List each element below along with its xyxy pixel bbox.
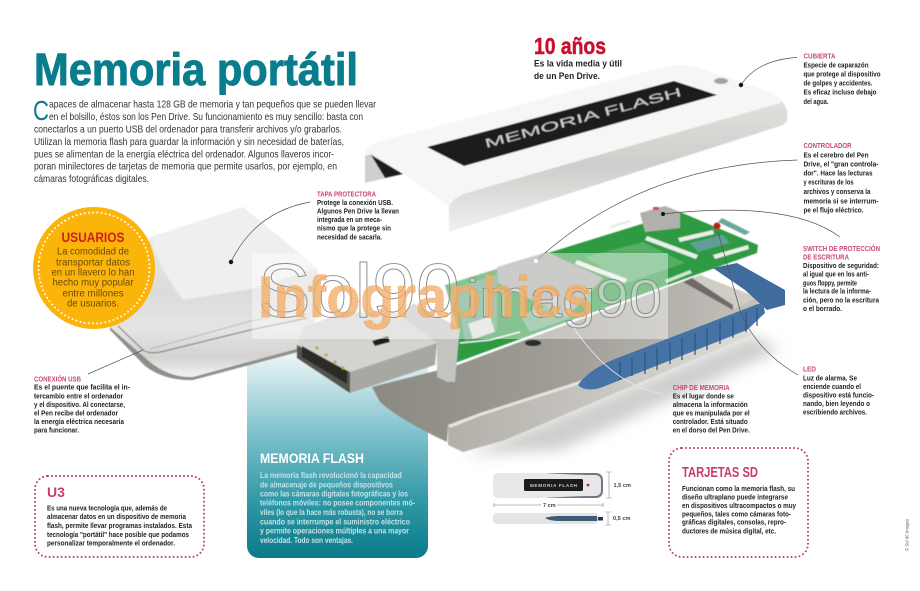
- callout circle: usuarios: de usuarios.: [67, 298, 119, 310]
- callout circle: usuarios: La comodidad de: [57, 246, 129, 258]
- black label: [427, 81, 717, 166]
- write-protect switch: [640, 206, 680, 232]
- caption: conexión USB: el Pen recibe del ordenador: [34, 409, 118, 418]
- illustration: USB plug: [297, 303, 460, 393]
- caption: controlador: Drive, el "gran controla-: [804, 159, 879, 168]
- 10 años heading: 10 años: [534, 33, 606, 59]
- leader: switch: [661, 210, 840, 237]
- caption: chip de memoria: almacena la información: [673, 400, 748, 409]
- text: memoria flash: viles (lo que la hace más robusta), no se borra: [260, 508, 403, 517]
- cover side band: [449, 97, 788, 232]
- board pale pane: [585, 242, 685, 283]
- caption: tapa protectora: TAPA PROTECTORA: [317, 190, 377, 198]
- caption: switch de protección: la lectura de la informa-: [803, 287, 871, 296]
- caption: switch de protección: Dispositivo de seguridad:: [803, 261, 879, 270]
- panel: tarjetas SD: Funcionan como la memoria flash, su: [682, 484, 795, 493]
- cover inner shadow: [365, 154, 403, 183]
- text: memoria flash: cuando se interrumpe el suministro eléctrico: [260, 518, 410, 527]
- panel: U3: personalizar temporalmente el ordenador.: [47, 538, 175, 548]
- caption: controlador: archivos y conserva la: [804, 187, 871, 196]
- caption: controlador: CONTROLADOR: [804, 141, 852, 150]
- plug top face: [297, 312, 437, 372]
- caption: controlador: Es el cerebro del Pen: [804, 150, 869, 159]
- caption: cubierta: de golpes y accidentes.: [804, 79, 872, 88]
- panel: tarjetas SD: diseño ultraplano puede integrarse: [682, 492, 788, 501]
- caption: conexión USB: Es el puente que facilita el in-: [34, 383, 130, 392]
- caption: switch de protección: ción, pero no la escritura: [803, 295, 880, 304]
- illustration: shadow under tray: [465, 335, 780, 455]
- caption: LED: nando, bien leyendo o: [803, 399, 870, 408]
- intro paragraph: poran minilectores de tarjetas de memoria que permite usarlos, por ejemplo, en: [34, 162, 337, 172]
- thickness dimension: [605, 512, 611, 525]
- text: memoria flash: teléfonos móviles: no posee componentes mó-: [260, 499, 415, 508]
- caption: chip de memoria: que es manipulada por el: [673, 409, 750, 418]
- components block: [690, 235, 730, 252]
- usuarios heading: USUARIOS: [62, 229, 124, 245]
- watermark outline word: imag90: [466, 269, 662, 329]
- caption: tapa protectora: necesidad de sacarla.: [317, 232, 382, 241]
- illustration: tray: [372, 275, 760, 452]
- caption: conexión USB: [34, 374, 130, 435]
- text: memoria flash: y permite operaciones múltiples a una mayor: [260, 527, 410, 536]
- caption: chip de memoria: [673, 383, 750, 435]
- watermark panel: [252, 253, 668, 339]
- panel: tarjetas SD: [669, 448, 808, 557]
- caption: LED: dispositivo está funcio-: [803, 390, 874, 399]
- intro paragraph: pues se alimentan de la energía eléctrica del ordenador. Algunos llaveros incor-: [34, 150, 334, 160]
- tarjetas heading: TARJETAS SD: [682, 465, 758, 481]
- caption: conexión USB: tercambio entre el ordenador: [34, 392, 123, 401]
- watermark outline brand: Sol90: [258, 249, 460, 334]
- contacts: [302, 346, 347, 384]
- leader: LED: [718, 232, 798, 375]
- height dimension: [606, 472, 612, 498]
- tray lip: [448, 328, 752, 452]
- intro paragraph: [33, 95, 376, 185]
- caption: chip de memoria: en el dorso del Pen Drive.: [673, 426, 750, 435]
- pen drive front view: [493, 473, 603, 498]
- leader: cubierta: [739, 58, 797, 87]
- dotted border: [669, 448, 808, 557]
- circle: [33, 207, 155, 329]
- caption: switch de protección: SWITCH DE PROTECCIÓN: [803, 244, 880, 253]
- plug front: [297, 345, 350, 393]
- intro paragraph: conectarlos a un puerto USB del ordenador para transferir archivos y/o grabarlos.: [34, 125, 342, 136]
- callout circle: usuarios: [33, 207, 155, 329]
- leader: chip de memoria: [570, 322, 663, 394]
- panel: U3: [35, 476, 204, 557]
- diagram: pen drive dimensions: 0,5 cm: [613, 516, 630, 522]
- text: memoria flash: velocidad. Todo son ventajas.: [260, 536, 353, 545]
- caption: chip de memoria: CHIP DE MEMORIA: [673, 383, 730, 392]
- callout: 10 años: [534, 33, 622, 82]
- panel: U3: flash, permite llevar programas instalados. Esta: [47, 521, 193, 530]
- caption: conexión USB: la energía eléctrica necesaria: [34, 417, 125, 426]
- title: Memoria portátil: [34, 44, 358, 95]
- illustration: circuit board: [445, 206, 758, 363]
- caption: switch de protección: al igual que en los anti-: [803, 270, 869, 279]
- LED: [714, 222, 720, 230]
- diagram: pen drive dimensions: MEMORIA FLASH: [530, 483, 578, 488]
- watermark: [252, 249, 668, 339]
- intro paragraph: en el bolsillo, éstos son los Pen Drive. Su funcionamiento es muy sencillo: basta con: [49, 112, 363, 123]
- caption: controlador: memoria si se interrum-: [804, 196, 879, 205]
- image credit: © Sol 90 Images: [904, 519, 910, 551]
- board underside knob: [525, 340, 541, 346]
- diagram: pen drive dimensions: 1,5 cm: [614, 483, 631, 489]
- callout circle: usuarios: en un llavero lo han: [52, 268, 134, 278]
- plug side face: [350, 343, 437, 393]
- caption: controlador: pe el flujo eléctrico.: [804, 206, 864, 215]
- plug collar: [400, 303, 460, 382]
- caption: tapa protectora: integrada en un meca-: [317, 215, 382, 224]
- callout circle: usuarios: hecho muy popular: [52, 278, 134, 288]
- caption: LED: LED: [803, 365, 817, 374]
- tray window: [683, 275, 757, 310]
- caption: LED: enciende cuando el: [803, 382, 861, 391]
- caption: LED: Luz de alarma. Se: [803, 373, 857, 382]
- caption: cubierta: Especie de caparazón: [804, 60, 869, 69]
- panel: tarjetas SD: ductores de música digital, etc.: [682, 526, 776, 535]
- diagram: pen drive dimensions: 7 cm: [543, 503, 556, 509]
- panel: U3: tecnología "portátil" hace posible que podamos: [47, 530, 189, 539]
- caption: switch de protección: guos floppy, permite: [803, 278, 857, 287]
- memoria flash heading: MEMORIA FLASH: [260, 450, 364, 466]
- illustration: USB protective cap: [110, 207, 322, 380]
- caption: switch de protección: [803, 244, 880, 313]
- small left components: [455, 275, 497, 342]
- cover button: [714, 78, 728, 84]
- caption: conexión USB: para funcionar.: [34, 426, 79, 435]
- caption: cubierta: CUBIERTA: [804, 51, 836, 60]
- text: memoria flash: de almacenaje de pequeños dispositivos: [260, 480, 393, 489]
- front label: [524, 479, 583, 491]
- controller chip: [497, 252, 603, 317]
- leader: conexión USB: [88, 350, 143, 374]
- text: memoria flash: La memoria flash revolucionó la capacidad: [260, 471, 402, 480]
- leader: tapa protectora: [229, 202, 310, 264]
- caption: conexión USB: y el dispositivo. Al conectarse,: [34, 400, 125, 409]
- illustration: cover with label: [365, 65, 788, 232]
- panel: memoria flash background: [247, 335, 428, 558]
- grip ribs: [620, 308, 757, 380]
- intro paragraph: cámaras fotográficas digitales.: [34, 174, 149, 185]
- text: memoria flash: como las cámaras digitales fotográficas y los: [260, 489, 408, 498]
- caption: cubierta: que protege al dispositivo: [804, 70, 881, 79]
- dotted border: [35, 476, 204, 557]
- caption: tapa protectora: [317, 190, 399, 241]
- caption: chip de memoria: Es el lugar donde se: [673, 392, 734, 401]
- intro paragraph: Utilizan la memoria flash para guardar la información y sin necesidad de baterías,: [34, 137, 344, 148]
- intro paragraph: apaces de almacenar hasta 128 GB de memoria y tan pequeños que se pueden llevar: [49, 100, 376, 110]
- illustration: blue back grip: [713, 263, 785, 310]
- U3 heading: U3: [47, 484, 65, 500]
- text: memoria flash: [260, 450, 415, 545]
- caption: controlador: y escrituras de los: [804, 178, 854, 187]
- panel: tarjetas SD: gráficas digitales, consolas, repro-: [682, 518, 786, 527]
- caption: LED: escribiendo archivos.: [803, 407, 867, 416]
- caption: switch de protección: DE ESCRITURA: [803, 252, 850, 261]
- label text: MEMORIA FLASH: [483, 85, 683, 151]
- leader: controlador: [534, 160, 798, 263]
- drop cap: C: [33, 95, 49, 126]
- caption: tapa protectora: Algunos Pen Drive la llevan: [317, 206, 399, 215]
- panel: tarjetas SD: en dispositivos ultracompactos o muy: [682, 501, 797, 510]
- panel: U3: Es una nueva tecnología que, además de: [47, 504, 167, 512]
- plug hole: [372, 336, 390, 346]
- caption: chip de memoria: controlador. Está situado: [673, 417, 748, 426]
- caption: LED: [803, 365, 874, 416]
- caption: cubierta: [804, 51, 881, 106]
- caption: controlador: dor". Hace las lecturas: [804, 169, 872, 178]
- caption: switch de protección: o el borrado.: [803, 304, 842, 313]
- caption: tapa protectora: nismo que la protege sin: [317, 224, 391, 233]
- pen drive side view: [493, 513, 598, 524]
- callout: 10 años: de un Pen Drive.: [534, 71, 600, 82]
- panel: tarjetas SD: pequeños, tales como cámaras foto-: [682, 509, 791, 518]
- length dimension: [494, 503, 603, 507]
- caption: tapa protectora: Protege la conexión USB.: [317, 198, 393, 207]
- callout circle: usuarios: entre millones: [62, 288, 124, 300]
- watermark orange text: Infographics: [258, 265, 593, 330]
- caption: cubierta: del agua.: [804, 97, 828, 106]
- caption: conexión USB: CONEXIÓN USB: [34, 374, 81, 383]
- diagram: pen drive dimensions: [493, 472, 631, 525]
- caption: cubierta: Es eficaz incluso debajo: [804, 88, 877, 97]
- cover top face: [365, 65, 781, 206]
- panel: U3: almacenar datos en un dispositivo de memoria: [47, 512, 187, 521]
- illustration: blue front grip: [578, 302, 765, 389]
- callout circle: usuarios: transportar datos: [56, 258, 130, 268]
- caption: controlador: [804, 141, 879, 215]
- white pad rows: [575, 260, 627, 283]
- callout: 10 años: Es la vida media y útil: [534, 58, 622, 70]
